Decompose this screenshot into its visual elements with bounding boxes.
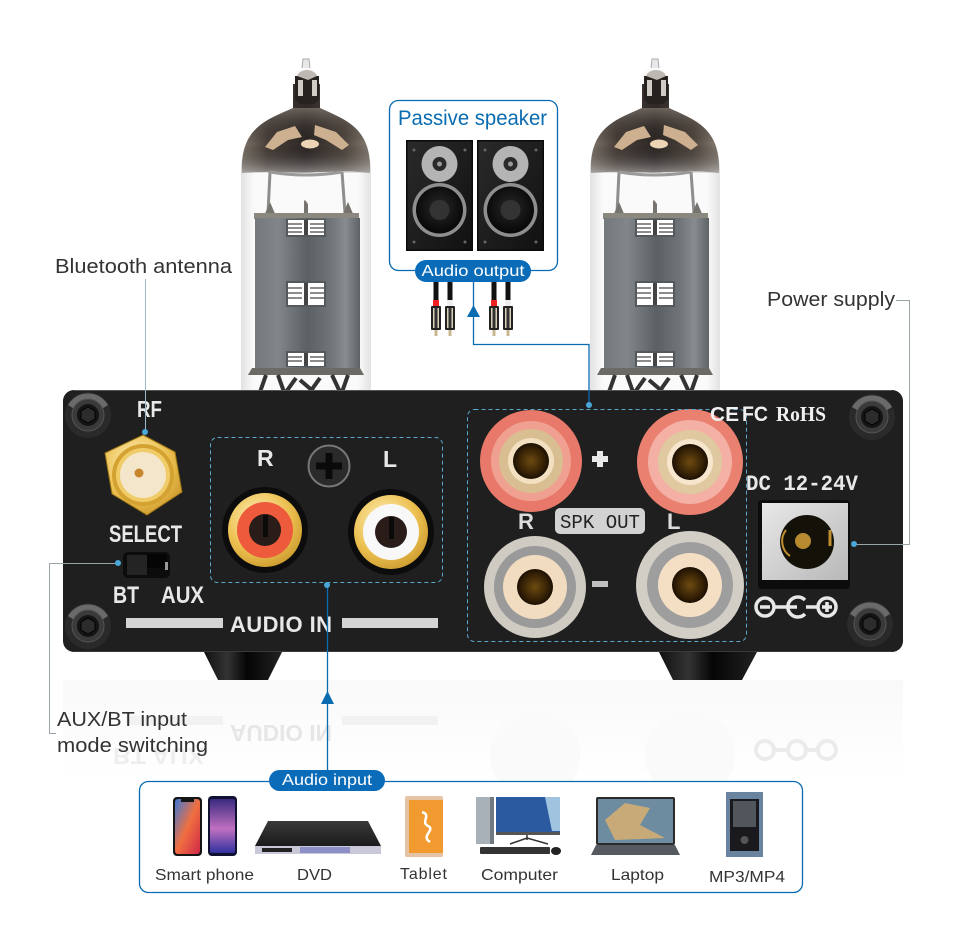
- RF label: RF: [137, 396, 162, 422]
- reflection of the amplifier: [63, 680, 903, 800]
- mode switch: [123, 552, 170, 578]
- speaker R and L labels: L: [667, 509, 680, 534]
- heading: passive speaker: Passive speaker: [398, 107, 547, 130]
- callout: bluetooth antenna: [55, 256, 233, 435]
- label: laptop: Laptop: [611, 867, 664, 884]
- binding post clear right channel: [484, 536, 586, 638]
- icon: DVD player: [255, 821, 381, 854]
- SPK OUT label: SPK OUT: [560, 512, 640, 534]
- audio output pill: Audio output: [422, 263, 525, 280]
- icon: laptop: [591, 797, 680, 855]
- speaker left: [406, 140, 473, 251]
- audio input pill: [269, 770, 385, 791]
- icon: tablet: [405, 796, 443, 857]
- binding post red left channel: [637, 409, 743, 515]
- label: smart phone: Smart phone: [155, 867, 254, 884]
- RCA jack left: [348, 489, 434, 575]
- AUDIO IN label with bars: AUDIO IN: [230, 612, 332, 637]
- audio in R and L labels: R: [257, 445, 274, 471]
- audio input devices panel: [140, 770, 802, 892]
- icon: computer: [476, 797, 561, 855]
- callout: AUX/BT input mode switching: [50, 560, 208, 757]
- polarity symbol: [756, 597, 836, 617]
- certification marks: CE: [710, 404, 739, 426]
- passive speaker panel: [390, 100, 558, 270]
- vacuum tube right: [590, 59, 720, 392]
- dashed box: audio in: [210, 438, 442, 582]
- RF antenna connector: [105, 435, 182, 515]
- feet: [204, 652, 757, 680]
- audio in R and L labels: [257, 445, 397, 472]
- dashed box: speaker out: [468, 410, 746, 642]
- icon: MP3 player: [726, 792, 763, 857]
- speaker right: [477, 140, 544, 251]
- arrow: audio in to devices: [321, 582, 334, 770]
- BT AUX labels: AUX: [161, 582, 204, 609]
- certification marks: [710, 402, 826, 426]
- DC power jack: [758, 500, 850, 589]
- binding post clear left channel: [636, 531, 744, 639]
- label: tablet: Tablet: [400, 866, 448, 883]
- RCA speaker plugs: [431, 282, 513, 336]
- callout: AUX/BT input mode switching: AUX/BT input: [57, 709, 187, 731]
- BT AUX labels: [113, 582, 204, 609]
- SELECT label: SELECT: [109, 521, 182, 548]
- audio input pill: Audio input: [282, 772, 373, 789]
- AUDIO IN label with bars: [126, 612, 438, 637]
- vacuum tube left: [241, 59, 371, 392]
- label: DVD: DVD: [297, 867, 332, 884]
- callout: AUX/BT input mode switching: mode switching: [57, 735, 208, 757]
- certification marks: RoHS: [776, 402, 826, 426]
- RCA jack right: [222, 487, 308, 573]
- callout: bluetooth antenna: Bluetooth antenna: [55, 256, 233, 278]
- callout: power supply: [767, 289, 910, 547]
- speaker R and L labels: [518, 509, 680, 534]
- speaker R and L labels: R: [518, 509, 534, 534]
- plus and minus symbols: [592, 451, 608, 587]
- corner screws: [65, 392, 895, 649]
- audio output pill: [415, 260, 531, 282]
- label: MP3/MP4: MP3/MP4: [709, 869, 785, 886]
- reflection of the amplifier: AUDIO IN: [230, 720, 332, 746]
- amplifier rear panel: [63, 390, 903, 652]
- DC voltage label: DC 12-24V: [746, 472, 859, 497]
- icon: smart phones: [173, 796, 237, 856]
- label: computer: Computer: [481, 867, 559, 884]
- reflection of the amplifier: BT AUX: [113, 743, 205, 769]
- arrow: speaker out to audio output: [467, 282, 592, 408]
- callout: power supply: Power supply: [767, 289, 895, 311]
- audio in R and L labels: L: [383, 446, 397, 472]
- BT AUX labels: BT: [113, 582, 139, 609]
- certification marks: FC: [742, 403, 768, 426]
- binding post red right channel: [480, 410, 582, 512]
- Phillips screw: [308, 446, 350, 486]
